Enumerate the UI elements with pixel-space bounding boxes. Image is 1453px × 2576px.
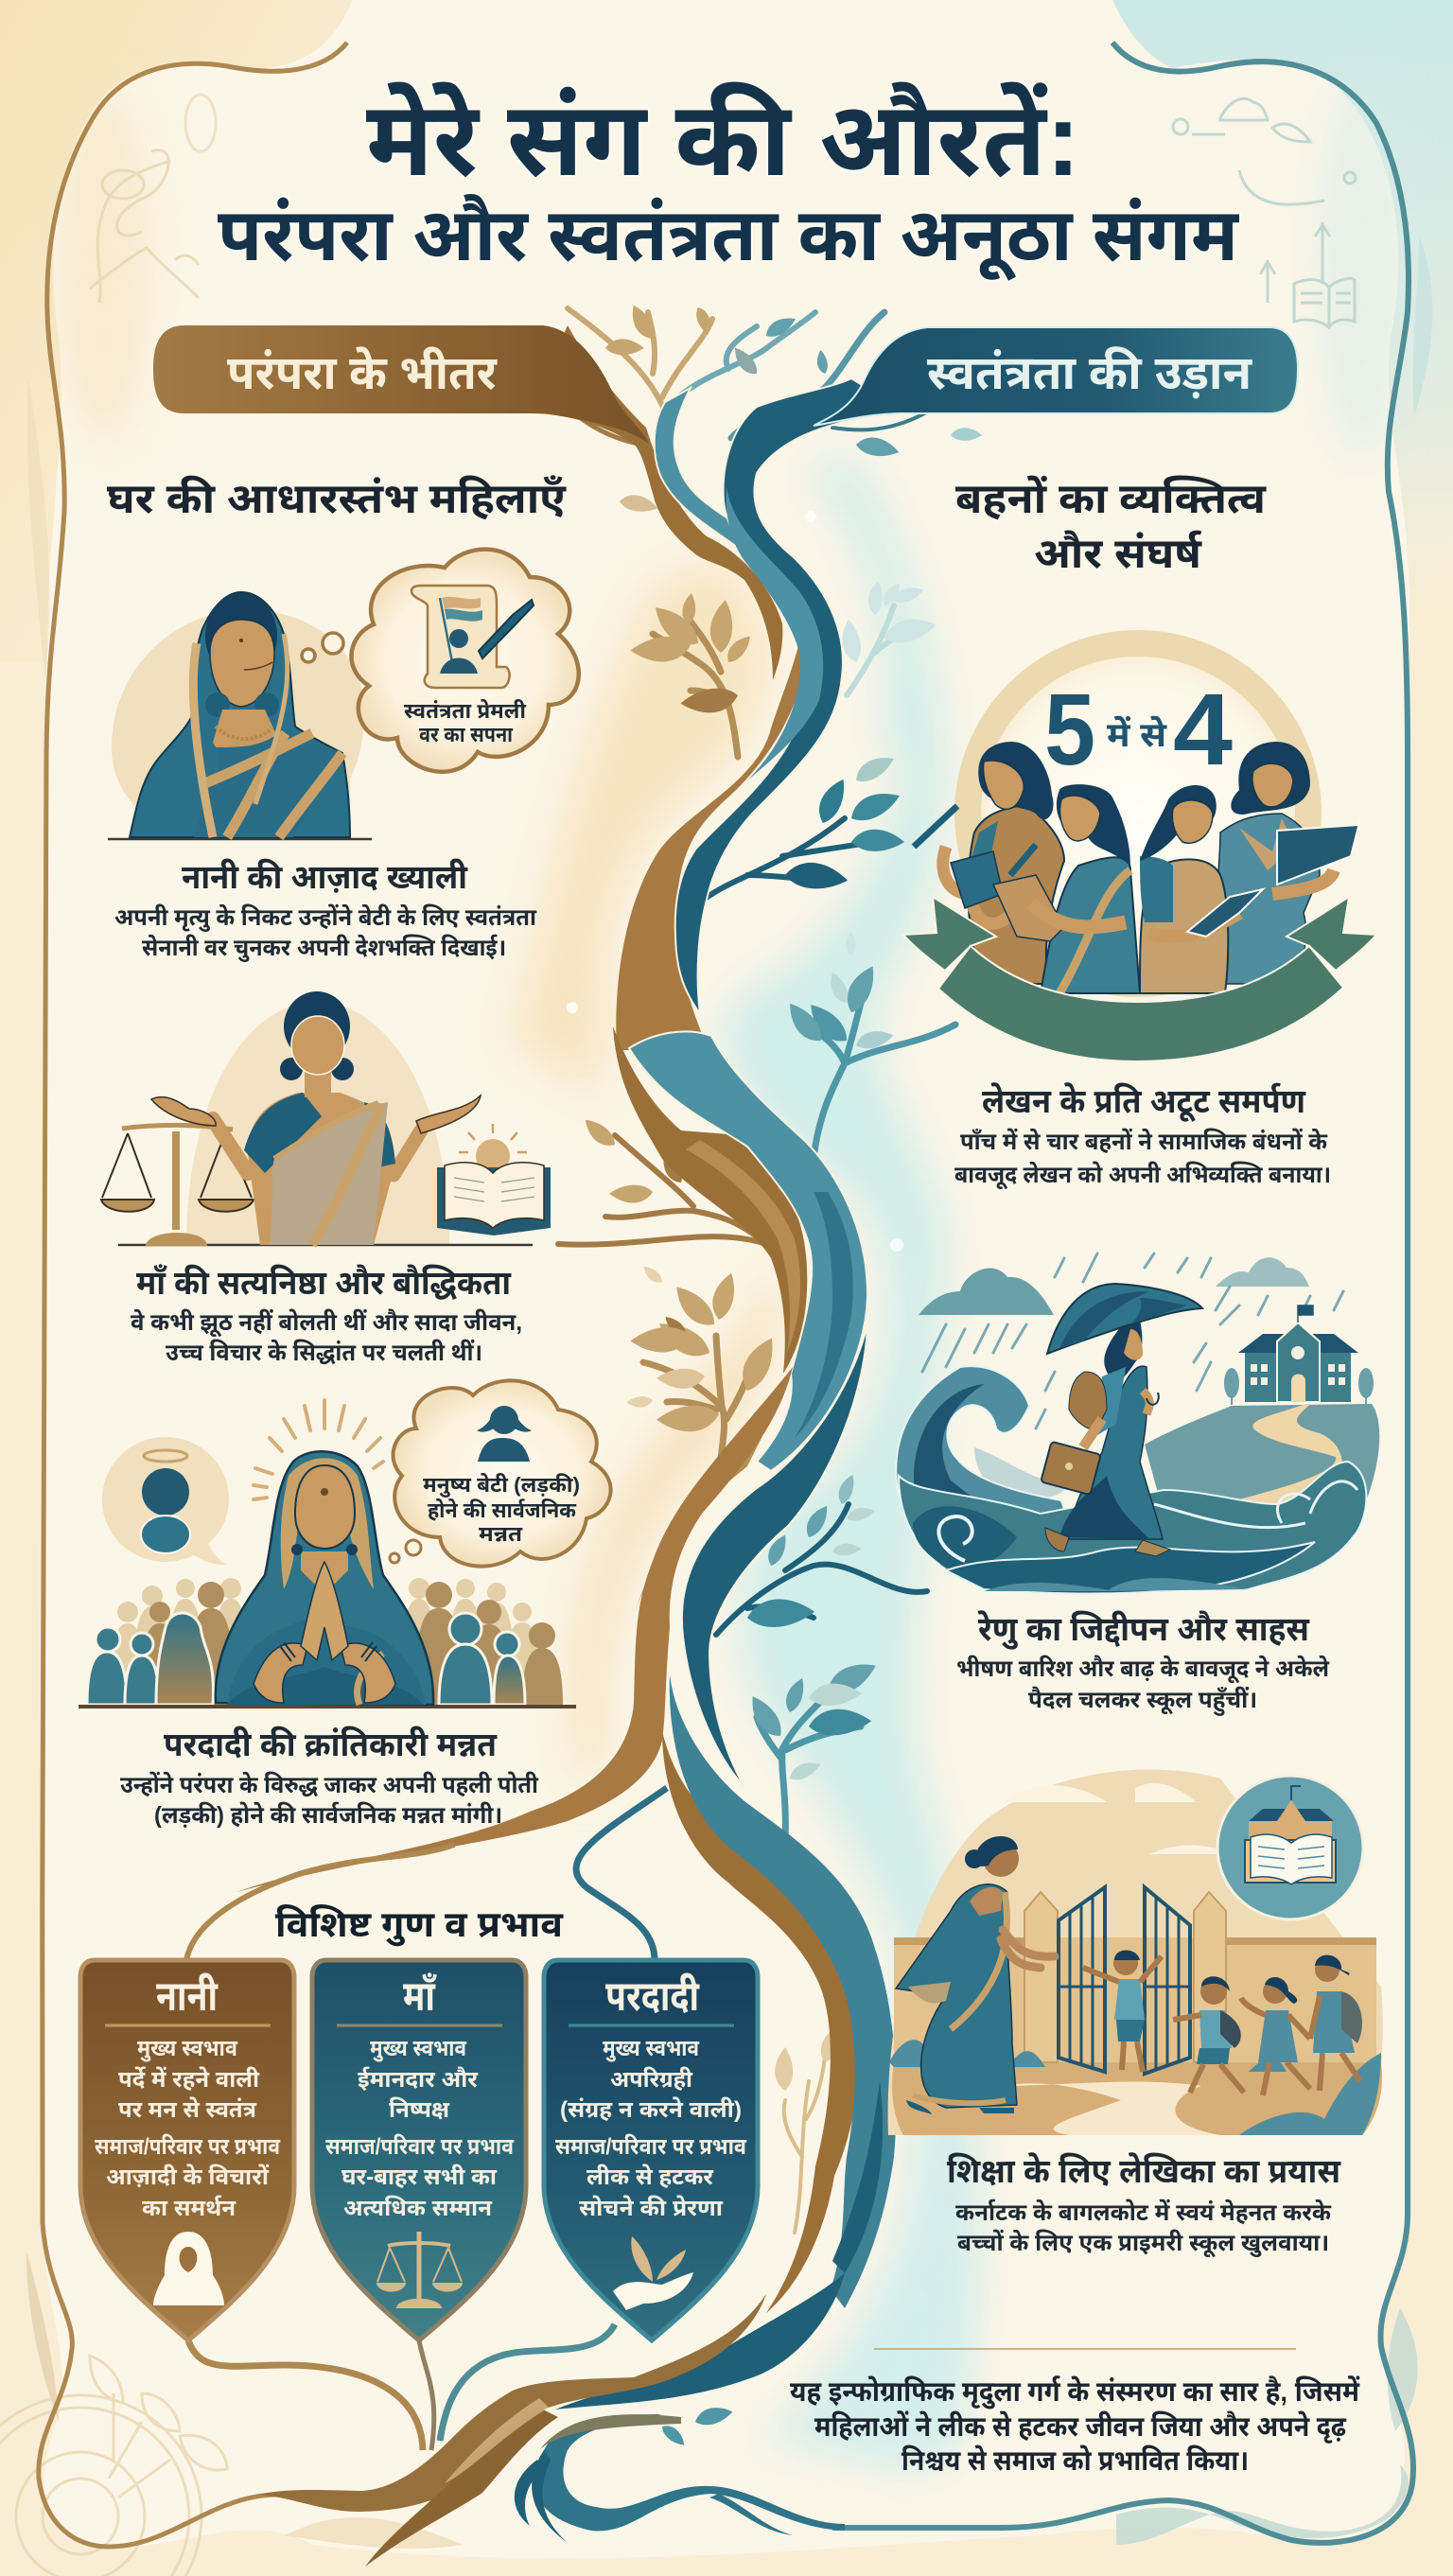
- tree: teal roots: [515, 2414, 845, 2543]
- card: nani: का समर्थन: [142, 2195, 236, 2221]
- banner: inside tradition: [153, 325, 649, 444]
- card: nani: [80, 1960, 294, 2340]
- rain: [922, 1253, 1343, 1428]
- icon: veiled woman: [153, 2232, 224, 2305]
- text: renu: [956, 1610, 1330, 1716]
- text: school effort: शिक्षा के लिए लेखिका का प्रयास: [947, 2152, 1341, 2190]
- waves: [896, 1366, 1366, 1593]
- stat: 5 out of 4: 4: [1173, 672, 1233, 786]
- icon: scales: [377, 2232, 462, 2307]
- card: mother: निष्पक्ष: [389, 2096, 450, 2123]
- tree: brown upper band: [530, 325, 782, 680]
- stat: 5 out of 4: 5: [1044, 672, 1095, 786]
- card: nani: पर्दे में रहने वाली: [118, 2066, 260, 2093]
- text: nani: अपनी मृत्यु के निकट उन्होंने बेटी के लिए स्वतंत्रता: [114, 903, 537, 932]
- text: mother: वे कभी झूठ नहीं बोलती थीं और सादा जीवन,: [131, 1308, 522, 1338]
- card: mother: माँ: [403, 1971, 437, 2020]
- title: परंपरा और स्वतंत्रता का अनूठा संगम: [218, 193, 1239, 281]
- text: writing: बावजूद लेखन को अपनी अभिव्यक्ति बनाया।: [954, 1161, 1331, 1190]
- speech bubble: baby: [102, 1437, 229, 1565]
- woman 1: [968, 804, 1064, 984]
- thought bubble: freedom fighter: वर का सपना: [419, 723, 513, 746]
- banner: inside tradition: परंपरा के भीतर: [227, 346, 498, 399]
- tree: dark teal lower band: [682, 1324, 867, 1787]
- tree: top thin branches: [558, 308, 984, 2233]
- tree: teal lower band: [629, 1031, 867, 1471]
- glows: [511, 454, 976, 2460]
- panel: renu in flood: [896, 1253, 1379, 1716]
- clouds: [919, 1269, 1054, 1315]
- footer summary: [790, 2374, 1360, 2477]
- ornament: right sketch doodles: [1173, 98, 1356, 327]
- panel: great-grandmother: [79, 1380, 611, 1829]
- card: great-grandmother: (संग्रह न करने वाली): [560, 2096, 742, 2123]
- illustration: mother with scales and book: [101, 991, 551, 1245]
- title: मेरे संग की औरतें:: [366, 80, 1080, 198]
- woman: [1041, 1284, 1202, 1556]
- thought bubble: freedom fighter: स्वतंत्रता प्रेमली: [404, 699, 527, 723]
- card: nani: नानी: [156, 1972, 219, 2020]
- card: great-grandmother: [544, 1960, 758, 2340]
- tree: connectors to cards: [186, 1788, 667, 2450]
- heading: right column: [955, 475, 1267, 577]
- text: renu: रेणु का जिद्दीपन और साहस: [977, 1610, 1310, 1650]
- text: school effort: [947, 2152, 1341, 2258]
- frame: left border: [39, 43, 374, 2547]
- panel: grandmother: [108, 550, 579, 962]
- card: mother: समाज/परिवार पर प्रभाव: [325, 2133, 514, 2160]
- text: mother: उच्च विचार के सिद्धांत पर चलती थीं।: [166, 1339, 482, 1366]
- thought bubble: daughter wish: मनुष्य बेटी (लड़की): [423, 1473, 580, 1498]
- footer summary: महिलाओं ने लीक से हटकर जीवन जिया और अपने दृढ़: [814, 2410, 1347, 2444]
- title: [218, 80, 1239, 281]
- tree: brown middle band: [616, 620, 806, 1050]
- woman 4: [1217, 814, 1320, 984]
- woman 2: [1041, 857, 1140, 993]
- card: nani: समाज/परिवार पर प्रभाव: [95, 2133, 280, 2160]
- illustration: nani portrait: [108, 592, 372, 839]
- school: [1224, 1306, 1374, 1405]
- card: great-grandmother: समाज/परिवार पर प्रभाव: [555, 2133, 746, 2160]
- text: writing: लेखन के प्रति अटूट समर्पण: [982, 1082, 1306, 1122]
- heading: right column: और संघर्ष: [1034, 530, 1202, 577]
- text: nani: नानी की आज़ाद ख्याली: [182, 858, 468, 896]
- card: great-grandmother: मुख्य स्वभाव: [603, 2036, 699, 2062]
- illustration: flood walk: [896, 1253, 1379, 1593]
- text: great-grandmother: परदादी की क्रांतिकारी मन्नत: [164, 1726, 498, 1763]
- text: great-grandmother: [120, 1726, 539, 1829]
- ribbon: [903, 897, 1376, 1061]
- text: great-grandmother: उन्होंने परंपरा के विरुद्ध जाकर अपनी पहली पोती: [120, 1771, 539, 1798]
- book with sun: [437, 1124, 551, 1235]
- text: renu: भीषण बारिश और बाढ़ के बावजूद ने अकेले: [956, 1655, 1330, 1684]
- panel: school effort: [888, 1769, 1383, 2258]
- grass: [889, 2040, 1381, 2135]
- banner: flight of freedom: स्वतंत्रता की उड़ान: [927, 346, 1252, 399]
- ornament: mandala: [0, 2356, 227, 2576]
- badge: school and book: [1217, 1776, 1363, 1919]
- card: great-grandmother: सोचने की प्रेरणा: [579, 2195, 724, 2221]
- text: renu: पैदल चलकर स्कूल पहुँचीं।: [1028, 1686, 1257, 1716]
- illustration: school gate scene: [888, 1769, 1383, 2135]
- tree: trunk and branches: [186, 302, 984, 2567]
- heading: left column: घर की आधारस्तंभ महिलाएँ: [107, 474, 567, 522]
- panel: sisters writing: [903, 643, 1376, 1190]
- thought bubble: daughter wish: मन्नत: [479, 1522, 522, 1546]
- card: great-grandmother: लीक से हटकर: [586, 2164, 713, 2190]
- stat: 5 out of 4: में से: [1107, 714, 1167, 754]
- text: writing: [954, 1082, 1331, 1190]
- tree: brown trunk crossing: [631, 1410, 776, 1624]
- card: mother: घर-बाहर सभी का: [341, 2164, 498, 2190]
- frame: right border: [832, 43, 1413, 2543]
- card: nani: मुख्य स्वभाव: [137, 2036, 237, 2062]
- illustration: crowd: [79, 1578, 576, 1707]
- teacher: [896, 1836, 1055, 2114]
- card: great-grandmother: अपरिग्रही: [610, 2066, 693, 2093]
- scales: [101, 1125, 254, 1245]
- text: writing: पाँच में से चार बहनों ने सामाजिक बंधनों के: [960, 1128, 1328, 1155]
- footer summary: यह इन्फोग्राफिक मृदुला गर्ग के संस्मरण का सार है, जिसमें: [790, 2374, 1360, 2410]
- kids: [1083, 1951, 1362, 2095]
- thought bubble: daughter wish: होने की सार्वजनिक: [428, 1498, 577, 1522]
- illustration: four writing sisters: [903, 643, 1376, 1061]
- tree: dark teal upper band: [675, 378, 908, 1014]
- text: great-grandmother: (लड़की) होने की सार्वजनिक मन्नत मांगी।: [154, 1801, 502, 1829]
- tree: light teal upper band: [655, 388, 832, 674]
- text: school effort: कर्नाटक के बागलकोट में स्वयं मेहनत करके: [955, 2199, 1332, 2226]
- icon: hand with sprout: [613, 2236, 693, 2310]
- tree: brown bottom band: [662, 1731, 860, 2313]
- card: mother: अत्यधिक सम्मान: [343, 2195, 493, 2221]
- tree: brown lower band: [613, 1026, 807, 1374]
- text: school effort: बच्चों के लिए एक प्राइमरी स्कूल खुलवाया।: [957, 2229, 1329, 2258]
- banner: flight of freedom: [814, 327, 1298, 426]
- thought bubble: freedom fighter: [302, 550, 579, 772]
- hill and path: [1145, 1404, 1379, 1514]
- card: great-grandmother: परदादी: [605, 1972, 700, 2020]
- stat: 5 out of 4: [1044, 672, 1233, 786]
- text: mother: माँ की सत्यनिष्ठा और बौद्धिकता: [136, 1264, 512, 1302]
- gate: [1059, 1887, 1190, 2074]
- text: mother: [131, 1264, 522, 1366]
- text: nani: [114, 858, 537, 962]
- footer summary: निश्चय से समाज को प्रभावित किया।: [902, 2444, 1249, 2477]
- heading: right column: बहनों का व्यक्तित्व: [955, 475, 1267, 522]
- card: mother: ईमानदार और: [358, 2066, 478, 2093]
- illustration: praying woman: [216, 1400, 433, 1705]
- woman 3: [1140, 859, 1228, 993]
- panel: mother: [101, 991, 551, 1366]
- text: nani: सेनानी वर चुनकर अपनी देशभक्ति दिखाई।: [142, 934, 506, 962]
- tree: teal bottom band: [670, 1674, 897, 2308]
- tree: brown root: [259, 2294, 766, 2567]
- card: mother: मुख्य स्वभाव: [370, 2036, 466, 2062]
- card: nani: आज़ादी के विचारों: [106, 2164, 270, 2190]
- ornament: left sketch doodles: [90, 95, 216, 303]
- thought bubble: daughter wish: [390, 1380, 611, 1567]
- heading: distinctive qualities: विशिष्ट गुण व प्रभाव: [275, 1903, 564, 1947]
- card: mother: [312, 1960, 526, 2340]
- card: nani: पर मन से स्वतंत्र: [118, 2096, 256, 2123]
- tree: leaves: [580, 302, 982, 2449]
